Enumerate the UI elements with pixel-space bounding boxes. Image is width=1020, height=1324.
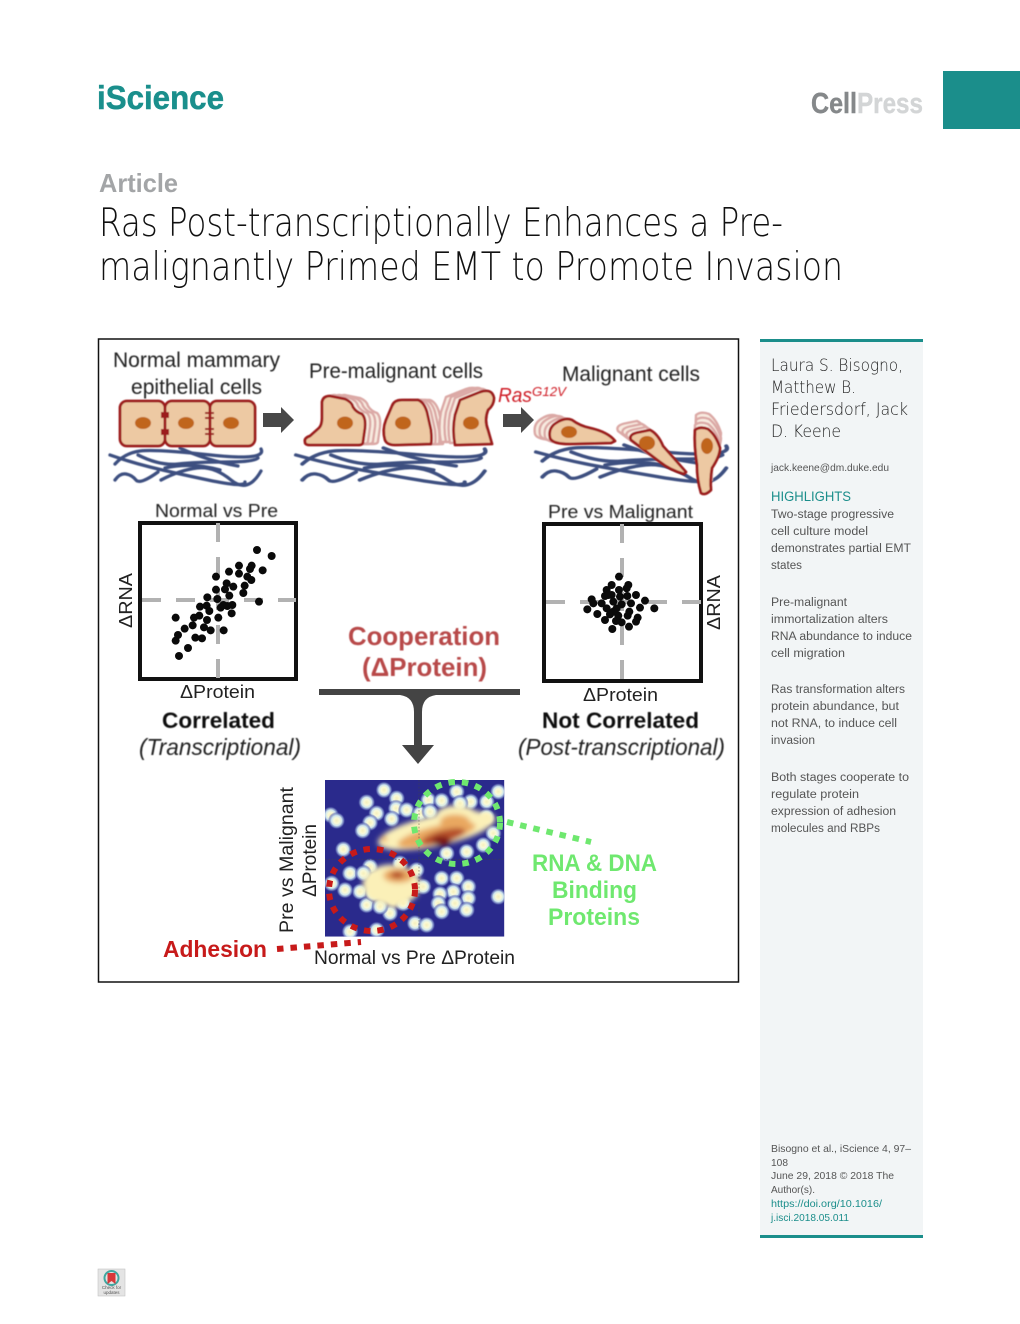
label: RNA and DNA binding proteins: Binding xyxy=(552,877,637,904)
highlight 1: states xyxy=(771,560,802,572)
y axis label: Pre vs Malignant xyxy=(277,786,298,933)
heading: normal cells xyxy=(113,349,280,399)
data points xyxy=(583,573,658,633)
blobs xyxy=(321,780,508,942)
label: adhesion: Adhesion xyxy=(163,936,267,962)
highlight 4: regulate protein xyxy=(771,789,859,801)
y axis label: ΔProtein xyxy=(300,824,321,897)
y axis label xyxy=(277,786,321,933)
label: RasG12V xyxy=(498,384,567,407)
title: Ras Post-transcriptionally Enhances a Pre- xyxy=(99,201,783,246)
scatter plot: normal vs pre xyxy=(116,501,296,702)
caption: correlated xyxy=(139,708,301,760)
plot heading: Normal vs Pre xyxy=(155,501,278,521)
authors xyxy=(771,356,908,442)
highlight 1: cell culture model xyxy=(771,526,868,538)
arrow: pre-malignant to malignant xyxy=(503,407,534,433)
highlight 4: molecules and RBPs xyxy=(771,823,880,835)
highlight 2: immortalization alters xyxy=(771,614,888,626)
plot heading: Pre vs Malignant xyxy=(548,502,693,522)
x axis label: Normal vs Pre ΔProtein xyxy=(314,948,515,969)
article label: Article xyxy=(99,168,178,198)
highlight 3: Ras transformation alters xyxy=(771,684,905,696)
teal corner block xyxy=(943,71,1020,129)
y axis label: ΔRNA xyxy=(116,573,136,628)
panel: sidebar xyxy=(760,339,923,1238)
authors: Matthew B. xyxy=(771,378,856,398)
icon: check for updates badge: Check for xyxy=(102,1285,122,1290)
label: RNA and DNA binding proteins xyxy=(532,850,657,931)
pre-malignant cells xyxy=(305,388,494,445)
highlight 4: expression of adhesion xyxy=(771,806,896,818)
icon: check for updates badge xyxy=(98,1269,125,1296)
citation: Bisogno et al., iScience 4, 97– xyxy=(771,1143,911,1155)
normal epithelial cells xyxy=(120,401,255,446)
label: RNA and DNA binding proteins: Proteins xyxy=(548,904,640,931)
x axis label: ΔProtein xyxy=(583,685,658,705)
heading: normal cells: epithelial cells xyxy=(131,376,262,399)
logo: CellPress xyxy=(811,88,923,120)
highlight 3: protein abundance, but xyxy=(771,701,900,713)
highlight 1 xyxy=(771,509,911,572)
highlight: adhesion cluster xyxy=(277,849,415,949)
authors: Friedersdorf, Jack xyxy=(771,400,908,420)
malignant cells xyxy=(535,413,721,494)
highlight 4 xyxy=(771,772,909,835)
highlight 3: not RNA, to induce cell xyxy=(771,718,897,730)
citation: June 29, 2018 © 2018 The xyxy=(771,1170,894,1182)
highlight 2: RNA abundance to induce xyxy=(771,631,912,643)
highlight 2: cell migration xyxy=(771,648,845,660)
scatter plot: pre vs malignant xyxy=(544,502,724,705)
density hot spots xyxy=(362,803,499,909)
logo: iScience: iScience xyxy=(97,79,224,116)
x axis label: ΔProtein xyxy=(180,682,255,702)
highlight: RNA and DNA binding cluster xyxy=(414,782,591,864)
highlight 2 xyxy=(771,597,912,660)
caption: not correlated: (Post-transcriptional) xyxy=(518,734,725,760)
extracellular matrix fibres xyxy=(110,445,727,485)
citation: Author(s). xyxy=(771,1184,815,1196)
heading: pre-malignant cells: Pre-malignant cells xyxy=(309,360,483,383)
citation xyxy=(770,1143,911,1224)
label: RasG12V: G12V xyxy=(532,384,567,399)
logo: CellPress: Press xyxy=(857,88,923,120)
highlights heading: HIGHLIGHTS xyxy=(771,489,851,504)
label: RNA and DNA binding proteins: RNA & DNA xyxy=(532,850,657,877)
correspondence email: jack.keene@dm.duke.edu xyxy=(770,462,889,474)
arrow: normal to pre-malignant xyxy=(263,407,294,433)
highlight 1: Two-stage progressive xyxy=(771,509,894,521)
caption: not correlated: Not Correlated xyxy=(542,708,699,733)
highlight 3: invasion xyxy=(771,735,815,747)
caption: not correlated xyxy=(518,708,725,760)
citation: https://doi.org/10.1016/ xyxy=(771,1198,882,1210)
caption: correlated: (Transcriptional) xyxy=(139,734,301,760)
citation: j.isci.2018.05.011 xyxy=(770,1212,849,1224)
heading: malignant cells: Malignant cells xyxy=(562,363,700,386)
citation: 108 xyxy=(771,1157,788,1169)
y axis label: ΔRNA xyxy=(704,575,724,630)
label: cooperation xyxy=(348,621,500,682)
label: cooperation: Cooperation xyxy=(348,621,500,651)
authors: D. Keene xyxy=(771,422,841,442)
panel: graphical abstract xyxy=(98,339,738,982)
title xyxy=(99,201,843,290)
logo: CellPress: Cell xyxy=(811,88,857,120)
label: cooperation: (ΔProtein) xyxy=(362,652,487,682)
caption: correlated: Correlated xyxy=(162,708,275,733)
highlight 3 xyxy=(771,684,905,747)
label: RasG12V: Ras xyxy=(498,385,532,407)
authors: Laura S. Bisogno, xyxy=(771,356,903,376)
title: malignantly Primed EMT to Promote Invasion xyxy=(99,245,843,290)
icon: check for updates badge: updates xyxy=(103,1290,120,1295)
arrow: merging bracket xyxy=(319,692,520,764)
highlight 2: Pre-malignant xyxy=(771,597,848,609)
heading: normal cells: Normal mammary xyxy=(113,349,280,372)
highlight 1: demonstrates partial EMT xyxy=(771,543,911,555)
data points xyxy=(172,546,276,660)
heatmap: protein changes xyxy=(321,780,508,942)
highlight 4: Both stages cooperate to xyxy=(771,772,909,784)
